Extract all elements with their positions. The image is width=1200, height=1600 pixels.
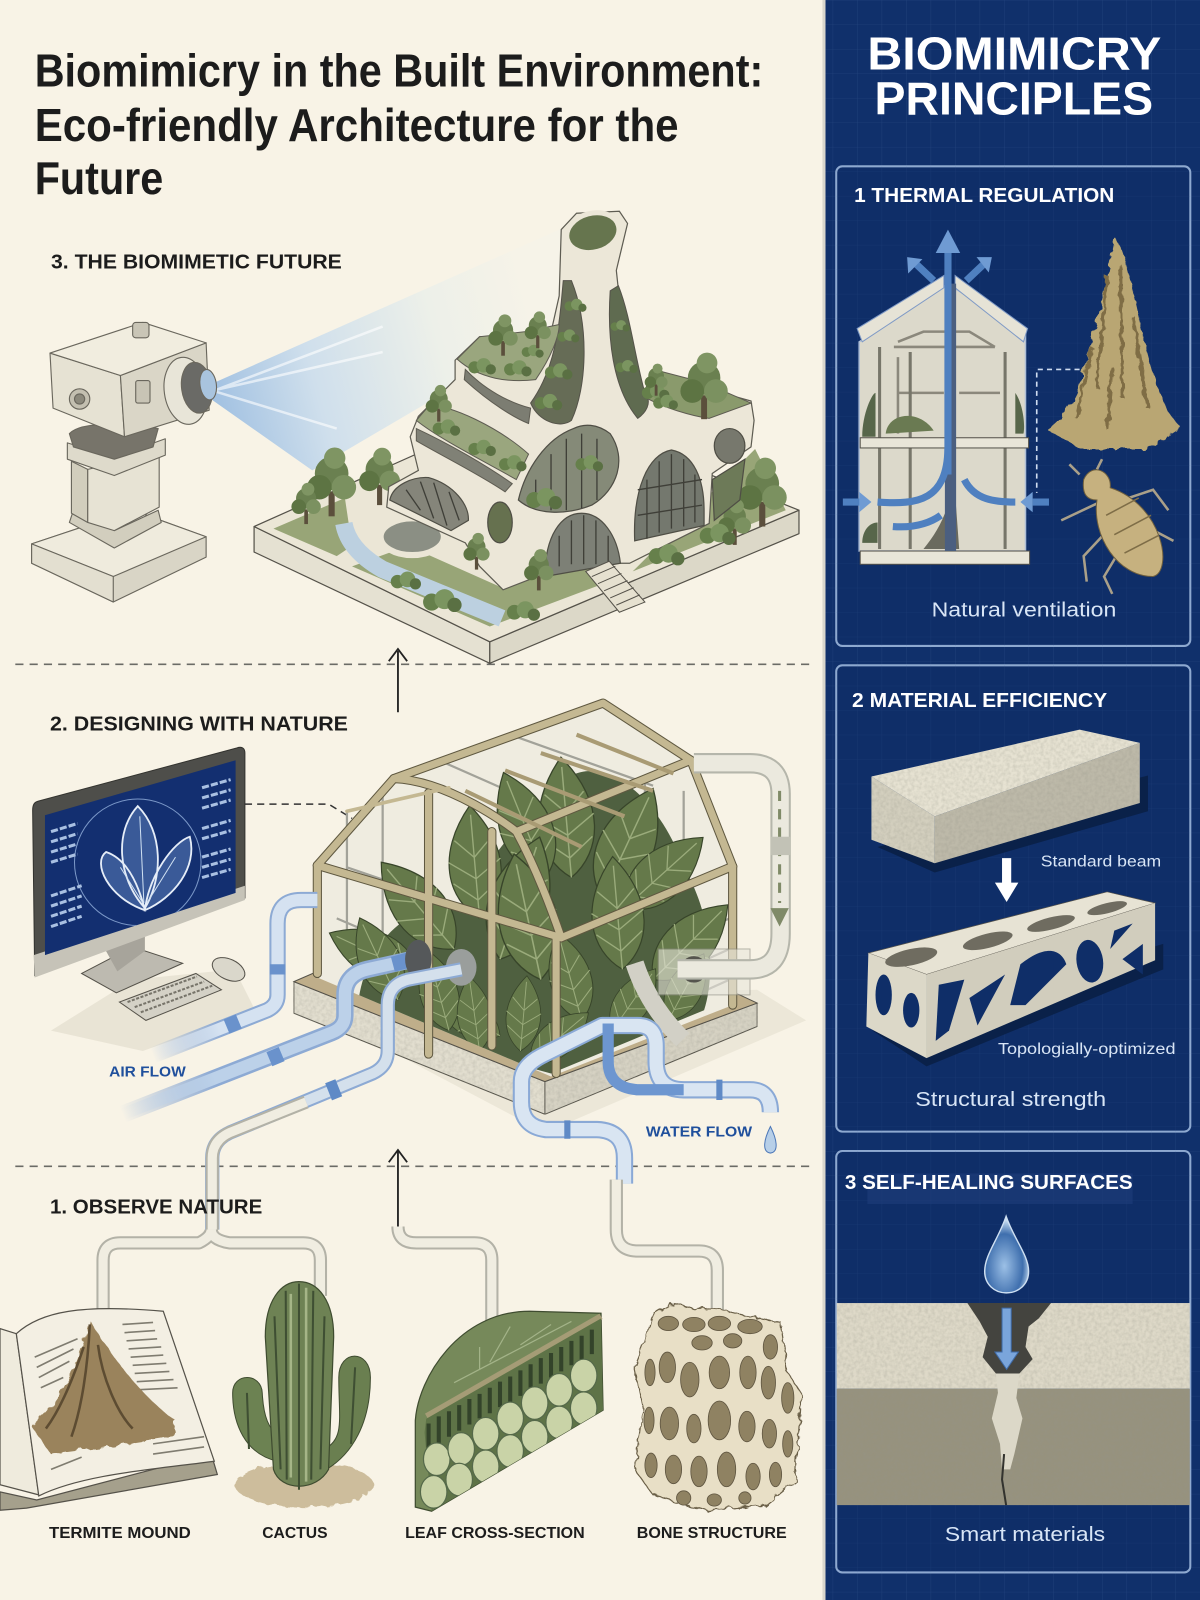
computer monitor with leaf blueprint	[31, 745, 352, 1051]
book text lines	[35, 1322, 204, 1469]
panel: self-healing surfaces	[836, 1151, 1190, 1572]
projector light beam	[212, 227, 592, 470]
optimized beam	[866, 892, 1163, 1066]
arrow down	[995, 858, 1018, 902]
caption: topologically optimized: Topologially-optimized	[998, 1041, 1176, 1058]
dashed connector	[1037, 369, 1080, 493]
interior grey duct	[635, 963, 683, 1040]
caption: Structural strength	[915, 1089, 1106, 1111]
window mullions	[406, 434, 702, 566]
termite	[1061, 459, 1173, 594]
main title	[35, 45, 763, 204]
specimen: bone structure	[635, 1303, 801, 1510]
biomimetic building on platform	[254, 207, 799, 663]
pipe two	[122, 959, 413, 1114]
caption: standard beam: Standard beam	[1041, 853, 1161, 870]
central duct	[945, 284, 956, 551]
openings	[390, 425, 745, 577]
terrace trees	[426, 311, 728, 422]
plants	[320, 755, 745, 1075]
planter base	[294, 888, 757, 1114]
specimen label: cactus: CACTUS	[262, 1525, 328, 1542]
pipe one	[153, 900, 317, 1055]
lens	[160, 354, 218, 427]
pipe three	[212, 969, 461, 1230]
specimen label: leaf cross-section: LEAF CROSS-SECTION	[405, 1525, 585, 1542]
water flow pipes	[521, 1023, 770, 1184]
front planting	[391, 524, 736, 621]
section divider lines	[15, 664, 813, 1166]
airflow arrows	[843, 250, 1049, 527]
trees behind	[291, 447, 787, 545]
glass interior	[317, 703, 733, 1077]
caption: Smart materials	[945, 1524, 1105, 1546]
ventilated house section	[843, 230, 1049, 564]
entrance stairs	[586, 561, 645, 612]
ground shadow	[294, 990, 806, 1133]
specimen: cactus	[233, 1282, 373, 1507]
greenhouse	[294, 703, 806, 1133]
sidebar title: BIOMIMICRY	[867, 27, 1161, 79]
crack	[967, 1303, 1051, 1505]
arrow: design to future	[389, 649, 407, 712]
main title: Eco-friendly Architecture for the	[35, 99, 679, 151]
terraces	[416, 324, 751, 492]
camera on pedestal	[32, 322, 218, 602]
main title: Future	[35, 152, 163, 204]
camera body	[50, 322, 209, 437]
pump	[658, 949, 750, 995]
specimen label: bone structure: BONE STRUCTURE	[637, 1525, 787, 1542]
water drop	[985, 1216, 1029, 1293]
heading: 1 THERMAL REGULATION	[854, 185, 1114, 207]
heading: designing with nature: 2. DESIGNING WITH NATURE	[50, 714, 348, 736]
lawn patches	[273, 449, 786, 627]
blueprint screen	[45, 760, 236, 955]
specimen: book with termite mound	[0, 1309, 217, 1510]
panel: material efficiency	[836, 665, 1190, 1132]
heading: 3 SELF-HEALING SURFACES	[845, 1172, 1133, 1194]
water channel	[344, 523, 502, 618]
air flow label: AIR FLOW	[109, 1065, 186, 1081]
heading	[845, 1172, 1133, 1204]
termite mound	[32, 1320, 176, 1454]
arrow into crack	[995, 1308, 1018, 1369]
building volume	[387, 211, 754, 590]
termite mound	[1047, 238, 1182, 449]
panel: thermal regulation	[836, 166, 1190, 646]
return pipe	[678, 763, 791, 969]
tower slots	[531, 281, 648, 424]
specimen: leaf cross-section	[415, 1311, 603, 1511]
heading: 2 MATERIAL EFFICIENCY	[852, 690, 1108, 712]
wooden frame	[317, 703, 733, 1073]
concrete layers	[837, 1303, 1190, 1505]
water flow label: WATER FLOW	[646, 1125, 752, 1141]
sidebar background	[822, 0, 1200, 1600]
sidebar title: PRINCIPLES	[874, 72, 1153, 124]
water drop	[765, 1127, 776, 1153]
platform	[254, 403, 799, 663]
air flow pipes	[122, 900, 477, 1230]
heading: the biomimetic future: 3. THE BIOMIMETIC FUTURE	[51, 251, 342, 273]
pedestal	[32, 439, 206, 602]
heading: observe nature: 1. OBSERVE NATURE	[50, 1196, 262, 1218]
standard beam	[871, 730, 1148, 872]
foliage clumps	[433, 299, 678, 509]
main title: Biomimicry in the Built Environment:	[35, 45, 763, 97]
central void	[518, 425, 619, 512]
specimen label: termite mound: TERMITE MOUND	[49, 1525, 191, 1542]
specimen connector pipes	[103, 1180, 717, 1321]
caption: Natural ventilation	[932, 599, 1116, 621]
arrow: observe to design	[389, 1150, 407, 1230]
sidebar title	[867, 27, 1161, 124]
open book	[0, 1309, 217, 1510]
keyboard and mouse	[119, 953, 249, 1020]
